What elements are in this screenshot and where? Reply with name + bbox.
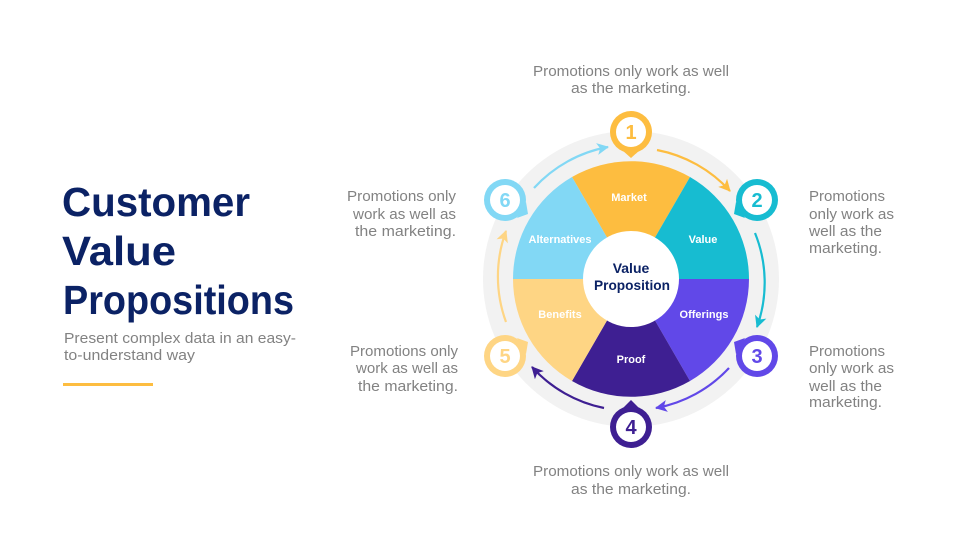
marker 3: 3 bbox=[751, 346, 763, 368]
subtitle bbox=[64, 330, 296, 364]
marker 1: 1 bbox=[625, 122, 637, 144]
text block 4: Promotions only work as well bbox=[533, 463, 729, 480]
text block 3 bbox=[808, 343, 894, 411]
marker 5 bbox=[484, 335, 528, 377]
text block 4: as the marketing. bbox=[571, 481, 691, 498]
marker 4: 4 bbox=[625, 417, 637, 439]
text block 2: only work as bbox=[809, 206, 894, 223]
segment: Alternatives: Alternatives bbox=[528, 234, 592, 246]
text block 6: the marketing. bbox=[355, 223, 456, 240]
segment: Offerings bbox=[631, 279, 749, 381]
center hub: Proposition bbox=[594, 277, 670, 293]
segment: Value bbox=[631, 177, 749, 279]
subtitle: Present complex data in an easy- bbox=[64, 330, 296, 347]
text block 5: the marketing. bbox=[358, 378, 458, 395]
text block 2: marketing. bbox=[809, 240, 882, 257]
segment: Proof: Proof bbox=[617, 354, 646, 366]
arrow: 4 to 5 bbox=[532, 367, 604, 408]
text block 2 bbox=[808, 188, 894, 257]
arrow: 3 to 4 bbox=[656, 368, 729, 408]
text block 6 bbox=[347, 188, 456, 240]
title: Propositions bbox=[63, 277, 294, 323]
center hub: Value bbox=[613, 260, 649, 276]
text block 3: Promotions bbox=[809, 343, 885, 360]
text block 6: work as well as bbox=[352, 206, 456, 223]
segment: Value: Value bbox=[689, 234, 717, 246]
marker 6 bbox=[484, 179, 528, 221]
text block 6: Promotions only bbox=[347, 188, 456, 205]
background disc bbox=[483, 131, 779, 427]
text block 3: marketing. bbox=[809, 394, 882, 411]
marker 3 bbox=[734, 335, 778, 377]
segment: Market bbox=[572, 161, 690, 279]
title bbox=[62, 179, 294, 323]
segment: Alternatives bbox=[513, 177, 631, 279]
text block 3: well as the bbox=[808, 378, 882, 395]
arrow: 5 to 6 bbox=[498, 231, 506, 322]
text block 5: Promotions only bbox=[350, 343, 458, 360]
segment: Benefits: Benefits bbox=[538, 309, 582, 321]
marker 6: 6 bbox=[499, 190, 511, 212]
marker 5: 5 bbox=[499, 346, 511, 368]
segment: Market: Market bbox=[611, 192, 647, 204]
arrow: 2 to 3 bbox=[755, 233, 765, 327]
text block 5: work as well as bbox=[355, 360, 458, 377]
segment: Benefits bbox=[513, 279, 631, 381]
text block 1 bbox=[533, 63, 729, 97]
arrow: 6 to 1 bbox=[534, 147, 608, 188]
text block 1: Promotions only work as well bbox=[533, 63, 729, 80]
marker 4 bbox=[610, 400, 652, 448]
text block 2: Promotions bbox=[809, 188, 885, 205]
segment: Proof bbox=[572, 279, 690, 397]
marker 1 bbox=[610, 111, 652, 158]
title: Customer bbox=[62, 179, 250, 225]
title: Value bbox=[62, 228, 176, 274]
marker 2 bbox=[734, 179, 778, 221]
subtitle: to-understand way bbox=[64, 347, 196, 364]
segment: Offerings: Offerings bbox=[680, 309, 728, 321]
wheel diagram bbox=[483, 111, 779, 448]
text block 4 bbox=[533, 463, 729, 498]
text block 1: as the marketing. bbox=[571, 80, 691, 97]
marker 2: 2 bbox=[751, 190, 763, 212]
center hub bbox=[583, 231, 679, 327]
text block 5 bbox=[350, 343, 458, 395]
arrow: 1 to 2 bbox=[657, 150, 730, 191]
accent line bbox=[63, 383, 153, 386]
text block 3: only work as bbox=[809, 360, 894, 377]
text block 2: well as the bbox=[808, 223, 882, 240]
